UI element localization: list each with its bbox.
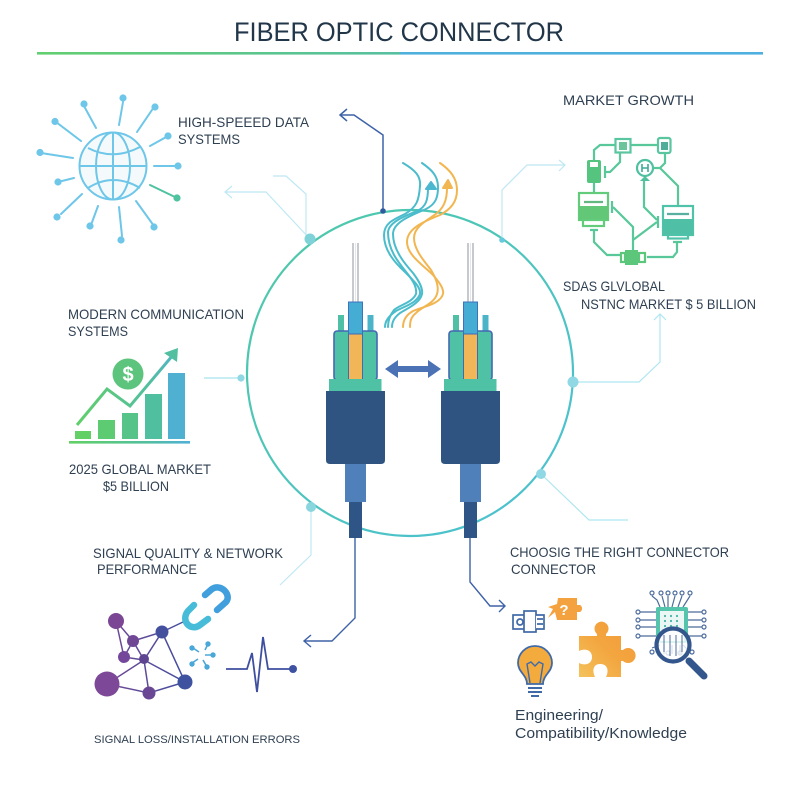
heading: high-speed data systems: SYSTEMS (178, 131, 240, 147)
icon: circuit network (579, 138, 693, 265)
icon: small connector (513, 611, 544, 632)
right connector (441, 243, 500, 538)
heading: high-speed data systems: HIGH-SPEEED DATA (178, 114, 310, 130)
bar chart with growth arrow: $ (122, 364, 134, 386)
icon: light bulb (518, 646, 552, 696)
fiber light waves (384, 163, 457, 327)
text: sdas global market (563, 278, 756, 312)
icon: pulse line (226, 637, 297, 692)
bar chart with growth arrow (69, 348, 190, 444)
heading: market growth: MARKET GROWTH (563, 92, 694, 108)
double arrow (385, 360, 441, 378)
text: signal loss: SIGNAL LOSS/INSTALLATION ERRORS (94, 734, 300, 746)
icon: puzzle question: ? (559, 602, 569, 619)
heading: modern communication systems: SYSTEMS (68, 323, 128, 339)
icon: chain link (185, 587, 228, 627)
text: engineering compatibility knowledge (515, 707, 687, 742)
icon: chip under magnifier (636, 591, 706, 676)
heading: modern communication systems (68, 306, 244, 339)
heading: modern communication systems: MODERN COMMUNICATION (68, 306, 244, 322)
text: engineering compatibility knowledge: Engineering/ (515, 707, 604, 724)
icon: network graph (94, 613, 192, 700)
heading: signal quality: PERFORMANCE (97, 561, 197, 577)
left connector (326, 243, 385, 538)
heading: signal quality (93, 545, 284, 577)
icon: puzzle piece (579, 622, 636, 677)
text: 2025 global market: 2025 GLOBAL MARKET (69, 461, 211, 477)
heading: signal quality: SIGNAL QUALITY & NETWORK (93, 545, 284, 561)
icon: globe with network nodes (36, 94, 182, 244)
heading: choosing connector (510, 544, 729, 577)
heading: choosing connector: CONNECTOR (511, 561, 596, 577)
icon: puzzle question (548, 598, 582, 620)
icon: burst (189, 641, 216, 670)
connector lines (204, 109, 666, 647)
text: 2025 global market (69, 461, 211, 494)
central circle (247, 210, 573, 536)
heading: choosing connector: CHOOSIG THE RIGHT CONNECTOR (510, 544, 729, 560)
text: sdas global market: NSTNC MARKET $ 5 BILLION (581, 296, 756, 312)
text: engineering compatibility knowledge: Compatibility/Knowledge (515, 725, 687, 742)
title: FIBER OPTIC CONNECTOR (234, 17, 564, 47)
text: sdas global market: SDAS GLVLOBAL (563, 278, 665, 294)
heading: high-speed data systems (178, 114, 310, 147)
text: 2025 global market: $5 BILLION (103, 478, 169, 494)
